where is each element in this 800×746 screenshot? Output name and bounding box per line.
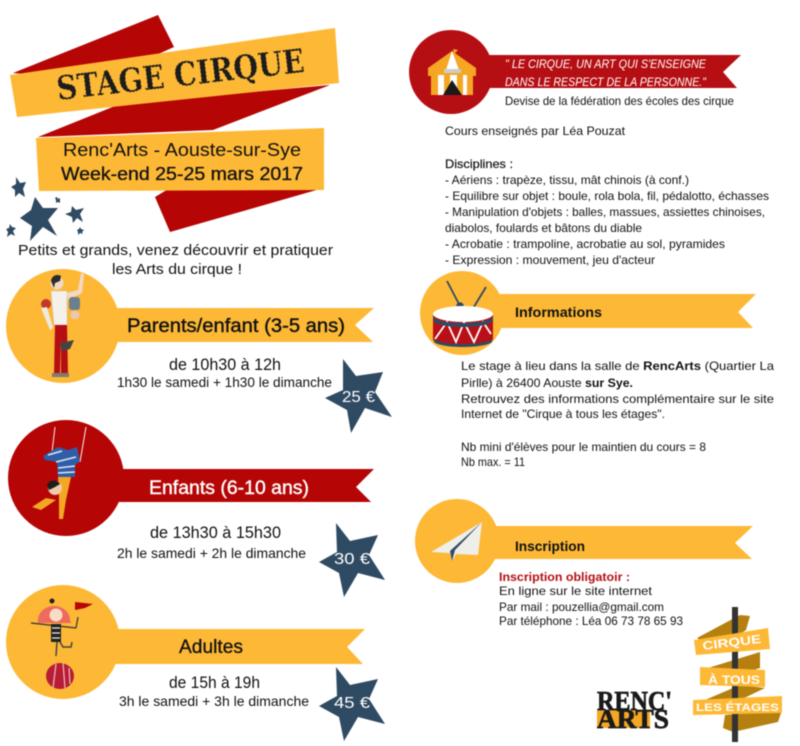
heading: Inscription — [515, 538, 585, 554]
panel: parents/enfant — [6, 269, 392, 433]
motto text — [505, 59, 707, 89]
sign text: À TOUS — [708, 672, 760, 687]
panel: inscription — [415, 499, 753, 583]
text block: inscription: Par mail : pouzellia@gmail.com — [499, 600, 664, 614]
panel: adultes — [6, 585, 385, 741]
ribbon with circle — [6, 269, 374, 383]
motto text: " LE CIRQUE, UN ART QUI S'ENSEIGNE — [505, 59, 706, 71]
sign ribbons — [697, 615, 782, 732]
text block: courses — [445, 124, 769, 267]
text block: information: Le stage à lieu dans la salle de RencArts (Quartier La — [461, 359, 774, 373]
panel: enfants: 2h le samedi + 2h le dimanche — [117, 545, 306, 561]
icon: acrobat balancing on ball — [31, 598, 93, 689]
intro text: Petits et grands, venez découvrir et pratiquer — [18, 242, 333, 259]
text block: information: Pirlle) à 26400 Aouste sur Sye. — [461, 376, 633, 390]
ribbon with circle — [420, 271, 756, 355]
text block: courses: Disciplines : — [445, 157, 513, 171]
red ribbon pieces — [13, 15, 330, 232]
title ribbon — [10, 28, 339, 117]
panel: enfants — [8, 420, 385, 597]
panel: informations — [420, 271, 756, 355]
header banner — [10, 15, 339, 232]
heading: Adultes — [179, 637, 243, 658]
text block: inscription: Par téléphone : Léa 06 73 78 65 93 — [499, 614, 683, 628]
text block: courses: - Manipulation d'objets : balles, massues, assiettes chinoises, — [445, 205, 765, 219]
text block: courses: diabolos, foulards et bâtons du diable — [445, 221, 642, 235]
text block: information: Nb max. = 11 — [461, 455, 525, 469]
icon: parent carrying children — [41, 273, 84, 377]
ribbon with circle — [415, 499, 753, 583]
sign text — [696, 632, 779, 714]
location ribbon — [36, 128, 324, 191]
heading: Informations — [515, 304, 602, 320]
panel: parents/enfant: 1h30 le samedi + 1h30 le dimanche — [117, 374, 332, 390]
location and date: Renc'Arts - Aouste-sur-Sye — [63, 140, 301, 160]
location and date — [61, 140, 303, 184]
ribbon with circle — [409, 30, 741, 114]
price star — [319, 667, 385, 741]
ribbon with circle — [6, 585, 365, 699]
schedule: de 13h30 à 15h30 — [150, 523, 281, 542]
text block: courses: - Equilibre sur objet : boule, rola bola, fil, pédalotto, échasses — [445, 189, 769, 203]
price star: 30 € — [334, 551, 370, 568]
heading: Parents/enfant (3-5 ans) — [127, 316, 345, 337]
text block: information: Internet de "Cirque à tous les étages". — [461, 407, 665, 421]
icon: paper plane — [431, 522, 482, 561]
text block: information: Retrouvez des informations complémentaire sur le site — [461, 392, 774, 406]
icon: circus tent — [428, 49, 476, 95]
motto text: DANS LE RESPECT DE LA PERSONNE." — [505, 77, 707, 89]
motto source: Devise de la fédération des écoles des cirque — [505, 94, 734, 108]
location and date: Week-end 25-25 mars 2017 — [61, 164, 303, 184]
panel: motto — [409, 30, 741, 114]
price star: 25 € — [342, 389, 375, 406]
sign text: CIRQUE — [702, 632, 762, 653]
price star: 45 € — [334, 695, 370, 712]
text block: information: Nb mini d'élèves pour le maintien du cours = 8 — [461, 440, 706, 454]
price star — [319, 523, 385, 597]
schedule: de 10h30 à 12h — [169, 355, 281, 374]
text block: courses: Cours enseignés par Léa Pouzat — [445, 124, 626, 138]
icon: stars — [6, 177, 84, 241]
text block: courses: - Acrobatie : trampoline, acrobatie au sol, pyramides — [445, 237, 725, 251]
text block: courses: - Expression : mouvement, jeu d'acteur — [445, 253, 655, 267]
ribbon with circle — [8, 420, 374, 536]
price star — [325, 359, 392, 433]
logo: Renc'Arts — [597, 686, 672, 734]
schedule: de 15h à 19h — [169, 673, 260, 692]
title: STAGE CIRQUE — [54, 41, 306, 108]
text block: inscription: Inscription obligatoir : — [499, 570, 630, 584]
intro text: les Arts du cirque ! — [112, 261, 242, 278]
heading: Enfants (6-10 ans) — [149, 478, 309, 499]
logo: Renc'Arts: ARTS — [597, 704, 669, 734]
icon: drum — [433, 281, 493, 347]
intro text — [18, 242, 333, 278]
logo: Renc'Arts: RENC' — [597, 686, 672, 716]
panel: adultes: 3h le samedi + 3h le dimanche — [119, 693, 309, 709]
signpost: cirque à tous les étages — [693, 607, 782, 742]
text block: courses: - Aériens : trapèze, tissu, mât chinois (à conf.) — [445, 173, 689, 187]
text block: information — [461, 359, 774, 469]
text block: inscription — [499, 570, 683, 628]
icon: trapeze artist — [32, 427, 86, 519]
sign plates — [693, 628, 782, 715]
sign text: LES ÉTAGES — [696, 701, 779, 714]
text block: inscription: En ligne sur le site internet — [499, 584, 653, 598]
pole — [732, 607, 738, 742]
